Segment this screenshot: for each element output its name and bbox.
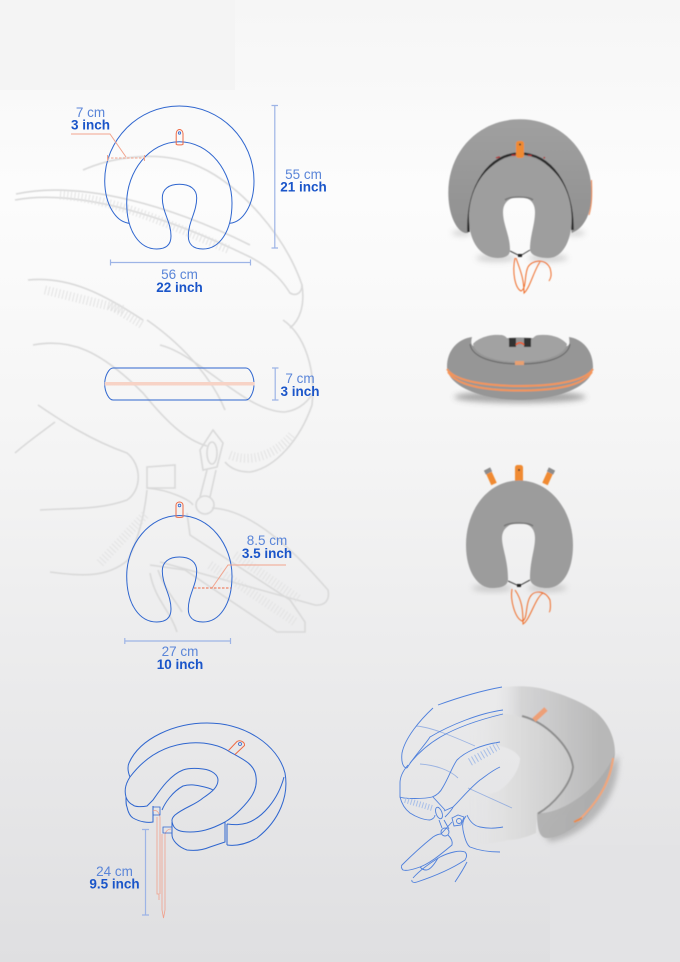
zipper <box>447 369 593 386</box>
orange tag <box>534 709 546 720</box>
inner pillow <box>470 712 572 845</box>
upper pillow <box>473 335 567 362</box>
gap shadow <box>522 716 573 814</box>
label 24 cm: 9.5 inch <box>89 876 140 892</box>
label 7 cm <box>71 105 110 132</box>
label 8.5 cm: 8.5 cm <box>247 533 287 548</box>
photo: half sketch half photo pillow <box>400 686 618 882</box>
shadow <box>472 584 567 592</box>
label 7 cm: 3 inch <box>71 118 110 132</box>
diagram: top view with extension <box>71 105 327 295</box>
label 8.5 cm <box>242 533 292 561</box>
label 55 cm: 55 cm <box>285 167 322 182</box>
label 55 cm <box>280 167 327 194</box>
shadow <box>540 755 618 842</box>
outline <box>105 368 254 400</box>
outer extension <box>495 686 615 838</box>
outline: inner pillow <box>127 142 232 249</box>
dimension height <box>272 106 278 248</box>
dimension height <box>272 368 278 400</box>
diagram: pillow alone <box>125 502 292 672</box>
label 55 cm: 21 inch <box>280 180 327 194</box>
orange tag <box>515 361 524 365</box>
tag <box>176 502 183 517</box>
outline: outer extension <box>105 106 254 223</box>
label 8.5 cm: 3.5 inch <box>242 546 292 561</box>
sketch part <box>400 687 512 882</box>
diagram: perspective view <box>89 723 286 918</box>
outline <box>127 516 232 622</box>
photo: pillow with extension, side view <box>447 335 593 403</box>
background sketch: helmet and straps <box>15 156 328 632</box>
cord <box>514 258 551 293</box>
label 24 cm <box>89 864 140 892</box>
cords <box>153 807 172 918</box>
label 7 cm: 7 cm <box>285 371 315 386</box>
body <box>447 337 593 400</box>
outline: inner pillow surface <box>125 743 256 832</box>
diagram: side view <box>105 368 320 400</box>
label 7 cm <box>280 371 320 399</box>
pillow <box>466 480 573 588</box>
outer extension <box>448 119 592 233</box>
label 7 cm: 7 cm <box>76 105 105 120</box>
zipper <box>105 382 255 386</box>
zipper <box>578 758 613 821</box>
photo: pillow alone <box>466 465 573 624</box>
label 24 cm: 24 cm <box>96 864 133 879</box>
gap <box>468 154 573 232</box>
tag <box>176 130 183 145</box>
label 27 cm: 10 inch <box>157 657 203 672</box>
cord <box>512 589 550 624</box>
dimension width <box>125 638 230 644</box>
label 56 cm: 56 cm <box>161 267 198 282</box>
width indicator 7 cm <box>71 134 144 161</box>
rim shading <box>537 753 615 838</box>
label 56 cm <box>156 267 203 295</box>
shadow <box>452 230 585 262</box>
outline: hole wall <box>162 785 213 810</box>
label 27 cm <box>157 644 203 672</box>
photo part <box>470 686 618 845</box>
outline: side walls <box>126 797 153 822</box>
dimension width <box>110 260 250 266</box>
width indicator 8.5 cm <box>194 565 286 588</box>
label 56 cm: 22 inch <box>156 280 203 295</box>
label 7 cm: 3 inch <box>280 384 320 399</box>
photo: pillow with extension, top view <box>448 119 592 293</box>
orange tag <box>516 141 524 158</box>
tag <box>228 741 245 754</box>
shadow <box>454 391 586 403</box>
straps <box>487 465 552 484</box>
outline: outer extension back <box>128 723 286 845</box>
label 27 cm: 27 cm <box>162 644 198 659</box>
dimension height <box>142 830 149 915</box>
buckles <box>509 338 516 347</box>
inner pillow <box>469 157 572 258</box>
